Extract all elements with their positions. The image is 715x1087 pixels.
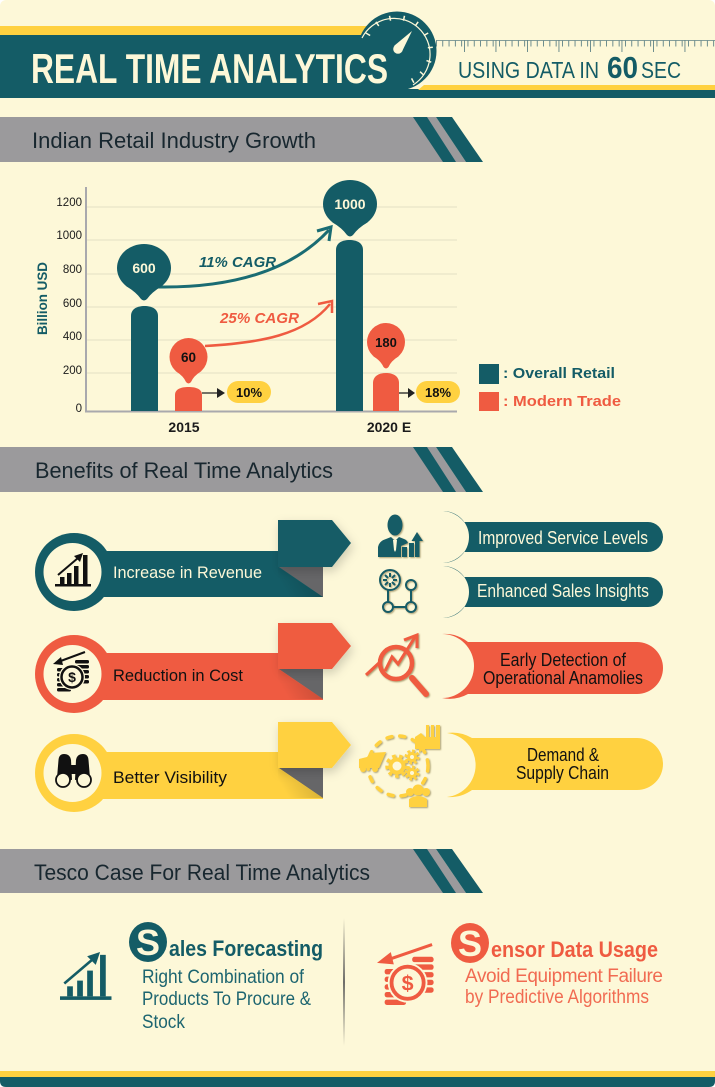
- case: Sensor Data Usage: ensor Data Usage: [491, 937, 658, 962]
- bubble: 600: 600: [132, 260, 156, 276]
- benefit: Better Visibility: [35, 722, 351, 812]
- section heading: Tesco Case: [0, 849, 483, 893]
- subtitle: [458, 50, 681, 85]
- benefit: Increase in Revenue: [35, 520, 351, 611]
- y axis title: Billion USD: [34, 262, 50, 335]
- case: Sensor Data Usage: by Predictive Algorithms: [465, 987, 649, 1008]
- case: Sensor Data Usage: [451, 923, 663, 1008]
- section heading: Benefits of Real Time Analytics: [0, 447, 483, 492]
- icon: falling cost coins red: [377, 945, 434, 1005]
- section heading: Indian Retail Industry Growth: Indian Retail Industry Growth: [32, 128, 316, 153]
- case: Sales Forecasting: S: [136, 922, 160, 963]
- y axis labels: 400: [63, 331, 82, 343]
- CAGR labels: [199, 254, 299, 327]
- CAGR labels: 11% CAGR: [199, 254, 276, 271]
- case: Sales Forecasting: Stock: [142, 1012, 185, 1033]
- bubble: 600: [117, 244, 171, 300]
- footer band: [0, 1071, 715, 1087]
- ruler: [436, 40, 715, 46]
- factory: [415, 725, 440, 753]
- bubble: 1000: [323, 180, 377, 236]
- growth arrow: 11% CAGR: [158, 227, 331, 287]
- case: Sales Forecasting: Right Combination of: [142, 967, 305, 988]
- share pill: 10%: [202, 381, 271, 403]
- pill: Early Detection: [442, 634, 663, 699]
- bubble: 1000: 1000: [334, 196, 366, 212]
- icon: binoculars: [56, 754, 91, 787]
- icon: growth chart: [55, 553, 91, 586]
- icon: falling cost coins: [53, 652, 89, 692]
- pill: Demand and Supply Chain: Demand &: [527, 745, 599, 765]
- x axis labels: 2020 E: [367, 419, 411, 435]
- subtitle: USING DATA IN: [458, 57, 599, 83]
- pill: Improved Service Levels: Improved Service Levels: [478, 528, 648, 548]
- case: Sensor Data Usage: Avoid Equipment Failure: [465, 966, 663, 987]
- pill: Early Detection: Operational Anamolies: [483, 668, 643, 688]
- share pill: 18%: 18%: [425, 385, 451, 400]
- pill: Improved Service Levels: [443, 511, 663, 563]
- main title: REAL TIME ANALYTICS: [31, 45, 388, 92]
- section heading: Indian Retail Industry Growth: [0, 117, 483, 162]
- legend: : Modern Trade: [503, 393, 621, 410]
- bars: [131, 240, 399, 411]
- legend: : Overall Retail: [503, 365, 615, 382]
- icon: falling cost coins: $: [68, 669, 76, 685]
- y axis labels: 600: [63, 298, 82, 310]
- case: Sales Forecasting: ales Forecasting: [169, 936, 323, 961]
- pill: Enhanced Sales Insights: Enhanced Sales Insights: [477, 581, 649, 601]
- y axis labels: 0: [76, 403, 82, 415]
- section heading: Benefits of Real Time Analytics: Benefits of Real Time Analytics: [35, 458, 333, 483]
- y axis labels: [56, 197, 82, 415]
- bubble: 180: 180: [375, 335, 397, 350]
- icon: magnifier with trend arrow: [366, 635, 426, 694]
- growth arrow: 25% CAGR: [205, 301, 332, 346]
- benefit: Better Visibility: Better Visibility: [113, 768, 227, 787]
- section heading: Tesco Case: Tesco Case For Real Time Analytics: [34, 860, 370, 885]
- share pill: 10%: 10%: [236, 385, 262, 400]
- subtitle: 60: [607, 50, 638, 85]
- case: Sales Forecasting: [129, 922, 323, 1033]
- pill: Early Detection: Early Detection of: [500, 650, 627, 670]
- people: [412, 784, 424, 796]
- x axis labels: 2015: [168, 419, 200, 435]
- subtitle: SEC: [641, 57, 681, 83]
- benefit: Increase in Revenue: Increase in Revenue: [113, 563, 262, 582]
- case: Sales Forecasting: Products To Procure &: [142, 989, 311, 1010]
- y axis labels: 200: [63, 365, 82, 377]
- y axis labels: 1200: [56, 197, 82, 209]
- benefit: Reduction in Cost: [35, 623, 351, 713]
- icon: speedometer gauge: [358, 12, 436, 90]
- icon: supply chain: [359, 725, 440, 807]
- x axis labels: [168, 419, 411, 435]
- pill: Demand and Supply Chain: Supply Chain: [516, 763, 609, 783]
- divider: [343, 918, 345, 1046]
- icon: person with rising chart: [378, 514, 423, 557]
- bubble: 180: [367, 323, 405, 368]
- icon: falling cost coins red: $: [402, 971, 414, 995]
- case: Sensor Data Usage: S: [458, 923, 482, 964]
- bubble: 60: [170, 338, 208, 384]
- benefit: Reduction in Cost: Reduction in Cost: [113, 666, 243, 685]
- CAGR labels: 25% CAGR: [219, 310, 299, 327]
- icon: growth chart teal: [60, 952, 111, 1000]
- y axis labels: 800: [63, 264, 82, 276]
- gears: [390, 760, 404, 772]
- bubble: 60: 60: [181, 350, 196, 365]
- legend: [479, 364, 621, 411]
- truck: [359, 752, 386, 768]
- pill: Enhanced Sales Insights: [443, 566, 663, 618]
- pill: Demand and Supply Chain: [447, 733, 663, 797]
- share pill: 18%: [399, 381, 460, 403]
- y axis labels: 1000: [56, 230, 82, 242]
- bar chart: retail growth: [34, 180, 460, 435]
- icon: network nodes: [380, 570, 416, 612]
- header banner: [0, 12, 715, 98]
